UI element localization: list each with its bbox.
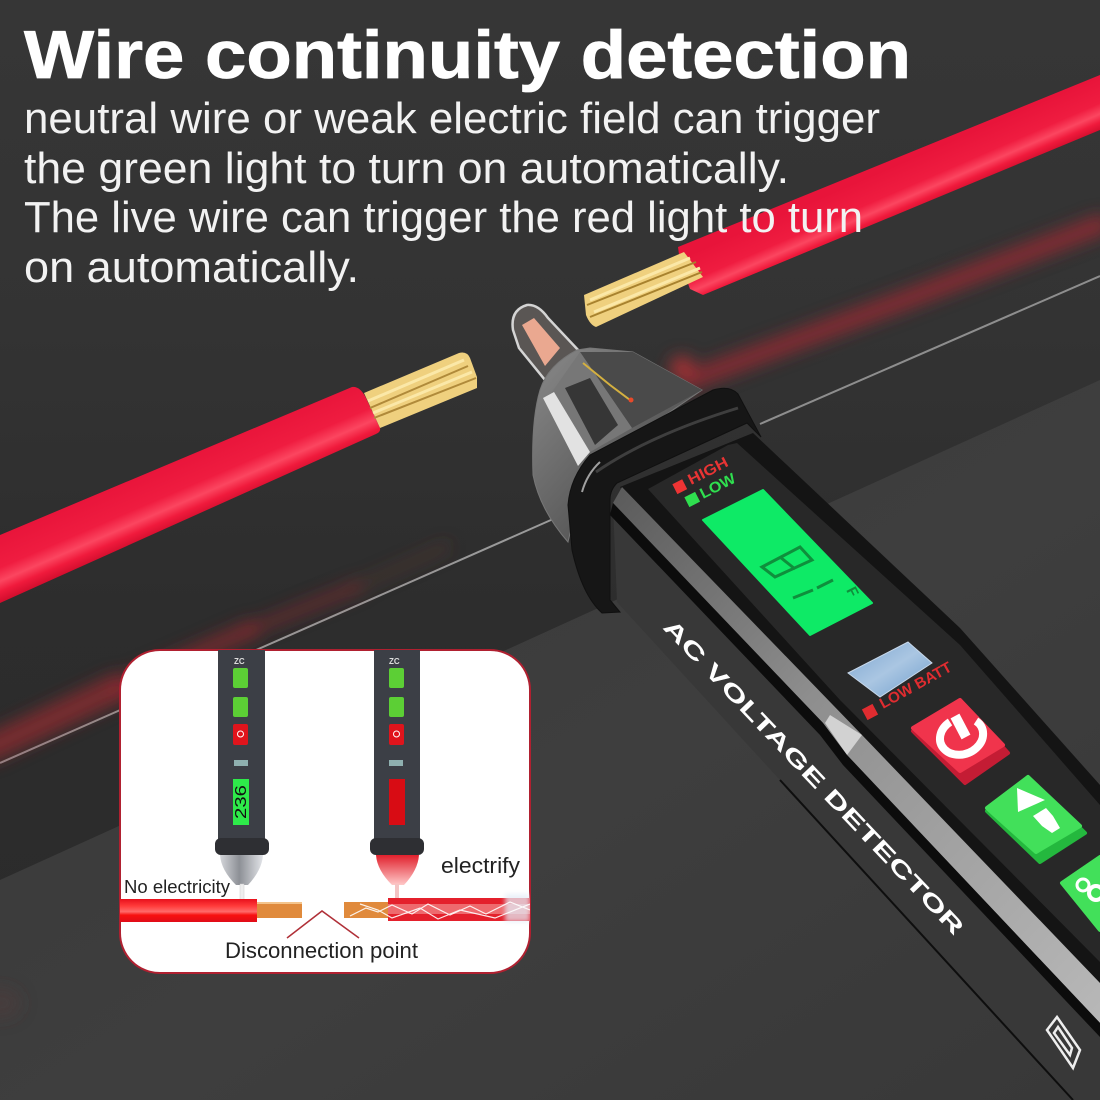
body side panel xyxy=(613,505,1100,1100)
LCD screen: F xyxy=(842,584,862,600)
copper strands xyxy=(584,252,703,327)
collar xyxy=(568,388,761,613)
inset left wire xyxy=(120,899,302,922)
green settings button xyxy=(1062,857,1100,930)
inset panel: disconnection point xyxy=(120,650,530,973)
description text xyxy=(24,94,880,292)
HIGH LOW indicators: LOW xyxy=(697,470,739,503)
double insulation symbol xyxy=(1047,1017,1080,1068)
HIGH LOW indicators xyxy=(672,454,739,507)
description text: neutral wire or weak electric field can trigger xyxy=(24,94,880,143)
inset pen left: 236 xyxy=(233,785,250,819)
detector pen xyxy=(513,305,1100,1100)
copper strands xyxy=(364,353,477,428)
LOW BATT label: LOW BATT xyxy=(877,659,955,712)
label: electrify: electrify xyxy=(441,853,520,878)
label: disconnection point: Disconnection point xyxy=(225,938,418,963)
title: Wire continuity detection xyxy=(24,17,911,93)
HIGH LOW indicators: HIGH xyxy=(685,454,731,489)
disconnection bracket xyxy=(287,911,359,938)
label: no electricity: No electricity xyxy=(124,877,230,897)
green flashlight button xyxy=(987,777,1085,862)
body front face xyxy=(620,433,1100,1030)
LCD screen xyxy=(703,490,872,635)
red glow reflections xyxy=(0,225,1100,1003)
right red wire xyxy=(584,75,1100,327)
inset pen left xyxy=(215,650,269,909)
inset pen right xyxy=(370,650,424,909)
inset right wire with lightning xyxy=(344,894,530,922)
grey stripe xyxy=(613,487,1100,1023)
inset pen right: ZC xyxy=(389,657,400,666)
low battery window xyxy=(848,642,932,697)
left red wire xyxy=(0,353,477,603)
transparent nose xyxy=(533,348,702,542)
description text: the green light to turn on automatically. xyxy=(24,144,789,193)
description text: The live wire can trigger the red light to turn xyxy=(24,193,863,242)
inset pen left: ZC xyxy=(234,657,245,666)
power button xyxy=(913,700,1008,783)
AC VOLTAGE DETECTOR label: AC VOLTAGE DETECTOR xyxy=(658,614,969,940)
probe tip xyxy=(513,305,580,380)
description text: on automatically. xyxy=(24,243,359,292)
